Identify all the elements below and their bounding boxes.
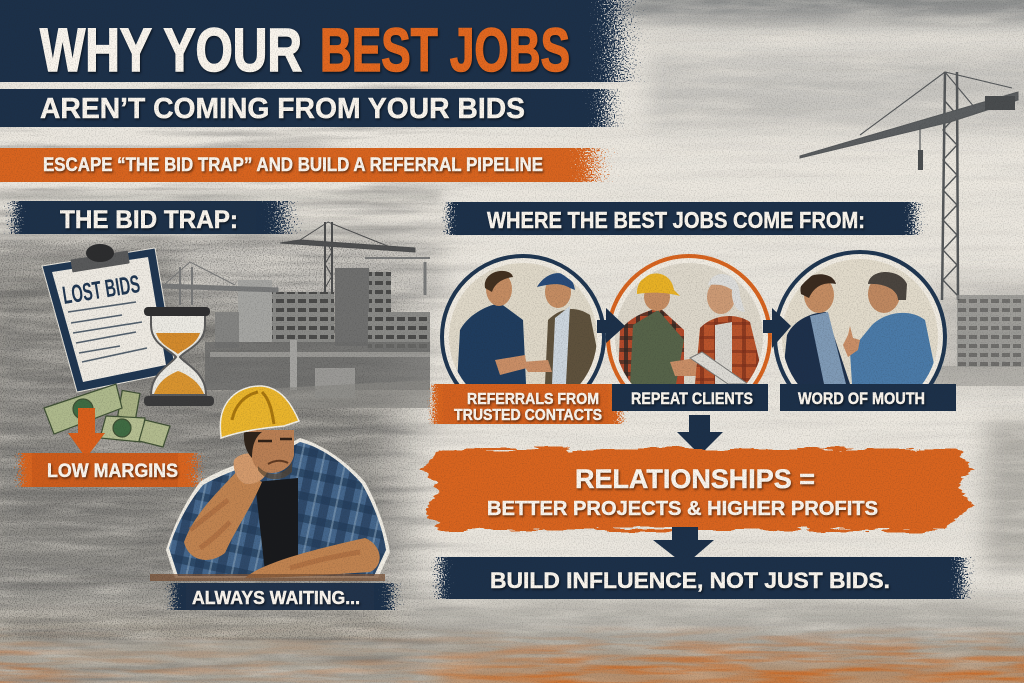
arm right (245, 538, 380, 578)
label: low margins (12, 453, 210, 487)
arrow: to word of mouth (763, 308, 791, 348)
icon: clipboard lost bids: LOST BIDS (61, 270, 142, 310)
skyline: left background (162, 222, 430, 408)
figure: waiting worker (150, 386, 390, 581)
title (40, 16, 570, 84)
arrow: down to influence (653, 527, 714, 565)
label: repeat clients: REPEAT CLIENTS (631, 389, 753, 408)
relationships heading: RELATIONSHIPS = (575, 464, 815, 494)
arrow: down to relationships (677, 415, 723, 455)
title: BEST JOBS (320, 16, 570, 84)
heading: where the best jobs come from (438, 202, 928, 235)
heading: where the best jobs come from: WHERE THE BEST JOBS COME FROM: (487, 207, 865, 233)
icon: down arrow orange (68, 408, 105, 458)
label: referrals from trusted contacts: REFERRALS FROM (467, 391, 599, 408)
buildings: right background (900, 295, 1024, 386)
arm left (184, 470, 262, 560)
crane: left small (162, 258, 430, 305)
heading: the bid trap: THE BID TRAP: (60, 206, 238, 234)
label: low margins: LOW MARGINS (47, 461, 178, 482)
icon: clipboard lost bids (42, 244, 176, 392)
panel: referrals portrait (440, 254, 606, 384)
panel: repeat clients portrait (606, 254, 772, 384)
icon: cash (44, 384, 170, 447)
label: repeat clients (612, 384, 768, 411)
arrow: to repeat clients (597, 308, 625, 343)
icon: hourglass (144, 307, 214, 406)
label: always waiting: ALWAYS WAITING... (192, 588, 360, 608)
crane: right background (800, 72, 1018, 300)
label: word of mouth (780, 384, 956, 411)
tagline: ESCAPE “THE BID TRAP” AND BUILD A REFERRAL PIPELINE (43, 155, 543, 176)
panel: word of mouth portrait (774, 250, 947, 384)
head (248, 430, 294, 473)
heading: the bid trap (2, 201, 306, 234)
relationships subheading: BETTER PROJECTS & HIGHER PROFITS (487, 498, 878, 520)
label: referrals from trusted contacts (425, 384, 630, 424)
label: word of mouth: WORD OF MOUTH (798, 389, 925, 408)
title band: navy (0, 0, 648, 127)
label: referrals from trusted contacts: TRUSTED CONTACTS (454, 407, 602, 424)
title: WHY YOUR (40, 16, 302, 84)
tagline band (0, 148, 620, 182)
crane: left large (280, 222, 415, 292)
label: always waiting (162, 583, 406, 610)
panel: build influence band (428, 557, 978, 599)
panel: relationships band (422, 449, 972, 530)
panel: build influence band: BUILD INFLUENCE, NOT JUST BIDS. (490, 568, 890, 593)
subtitle: AREN’T COMING FROM YOUR BIDS (40, 93, 525, 125)
hard hat (220, 386, 299, 438)
